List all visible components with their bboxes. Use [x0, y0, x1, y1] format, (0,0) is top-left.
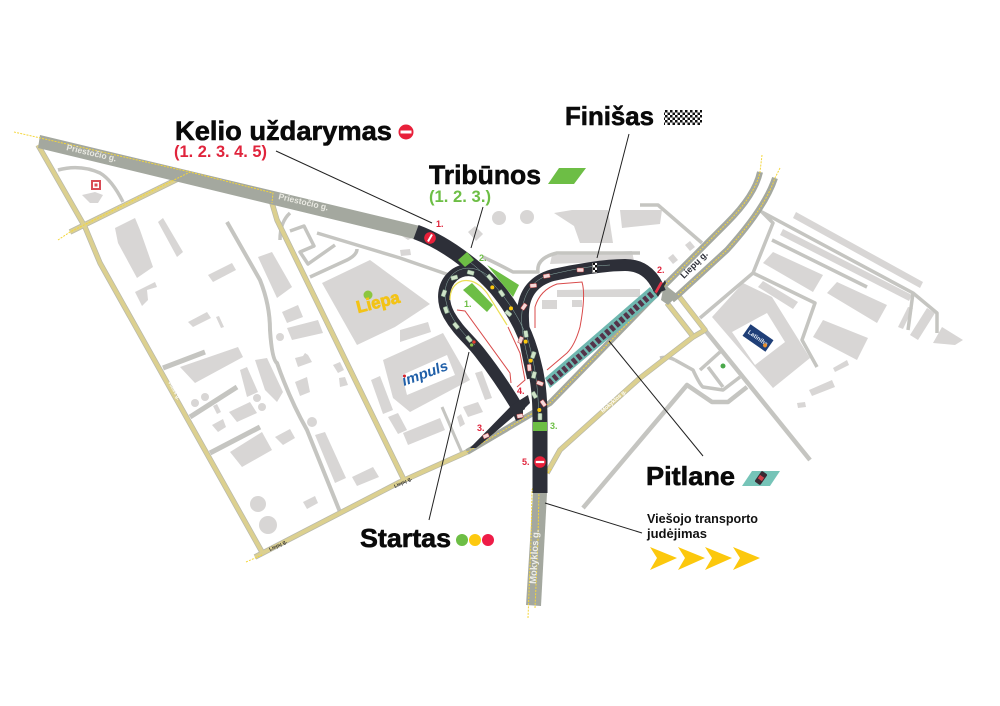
icon: start lights: [456, 534, 494, 546]
text: public transport: Viešojo transporto: [647, 512, 758, 526]
track: side exit: [470, 395, 530, 448]
green numbers: 2.: [479, 253, 487, 263]
icon: road closed 1: [422, 230, 438, 246]
icon: checkered flag: [664, 110, 702, 125]
yellow barrier line: [450, 280, 507, 325]
street labels: Mokyklos g.: [528, 529, 542, 584]
race cars: [441, 268, 663, 439]
track: junction tip: [656, 280, 666, 297]
race track: [416, 232, 666, 493]
tan side roads: [38, 145, 705, 557]
logo: store sign: Latiniha: [746, 330, 769, 348]
logo: impuls: [400, 355, 455, 395]
secondary grey roads: [58, 168, 937, 512]
road: Liepu street carriageways: [467, 172, 775, 452]
finish checker on track: [592, 263, 597, 273]
pitlane strip: [545, 287, 658, 388]
street labels: Priestočio g.: [278, 191, 330, 212]
text: public transport: judėjimas: [646, 527, 707, 541]
heading: Pitlane: Pitlane: [646, 461, 735, 491]
street labels: Priestočio g.: [66, 142, 118, 163]
red barrier lines: [457, 282, 584, 387]
red numbers: [436, 219, 665, 467]
heading: Tribūnos: (1. 2. 3.): [429, 188, 491, 206]
heading: Kelio uždarymas: Kelio uždarymas: [175, 116, 392, 146]
heading: Pitlane: [646, 461, 780, 491]
logo: red square sign: [91, 180, 101, 190]
green numbers: 3.: [550, 421, 558, 431]
icon: road closed 5: [534, 456, 546, 468]
road: Priestočio street: [38, 135, 420, 239]
text: public transport: [646, 512, 758, 541]
heading: Startas: Startas: [360, 523, 451, 553]
heading: Kelio uždarymas: [174, 116, 414, 161]
heading: Finišas: Finišas: [565, 101, 654, 131]
street labels: Liepų g.: [393, 476, 414, 490]
logo: store sign: [743, 324, 773, 352]
callout lines: [276, 134, 703, 533]
track: finish loop: [523, 265, 660, 378]
logo: Liepa: Liepa: [354, 288, 402, 317]
red numbers: 2.: [657, 265, 665, 275]
white panel inside store building: [732, 313, 785, 365]
green numbers: 1.: [464, 299, 472, 309]
buildings: [82, 192, 963, 534]
icon: yellow arrows: [650, 547, 760, 570]
icon: green stand: [548, 168, 586, 184]
street labels: Liepų g.: [678, 249, 710, 280]
green numbers: [464, 253, 558, 431]
red numbers: 1.: [436, 219, 444, 229]
public transport dashed route: [14, 132, 780, 618]
red numbers: 4.: [517, 386, 525, 396]
street labels: [66, 142, 710, 584]
red numbers: 5.: [522, 457, 530, 467]
track: start loop: [444, 270, 520, 412]
street labels: Mokyklos g.: [600, 389, 628, 414]
track: main road: [416, 232, 540, 493]
heading: Tribūnos: Tribūnos: [429, 160, 541, 190]
logo: green circle sign: [720, 364, 726, 368]
icon: pitlane car: [742, 471, 780, 486]
heading: Finišas: [565, 101, 702, 131]
logo: impuls: impuls: [400, 358, 450, 390]
street labels: Liepų g.: [268, 539, 289, 553]
heading: Tribūnos: [429, 160, 586, 206]
heading: Kelio uždarymas: (1. 2. 3. 4. 5): [174, 143, 267, 161]
heading: Startas: [360, 523, 494, 553]
green stands: [458, 252, 547, 431]
street labels: Vilties g.: [166, 380, 181, 402]
icon: no entry: [398, 124, 414, 140]
road: Mokyklos street: [526, 493, 547, 606]
red numbers: 3.: [477, 423, 485, 433]
track centre line: [445, 262, 610, 420]
